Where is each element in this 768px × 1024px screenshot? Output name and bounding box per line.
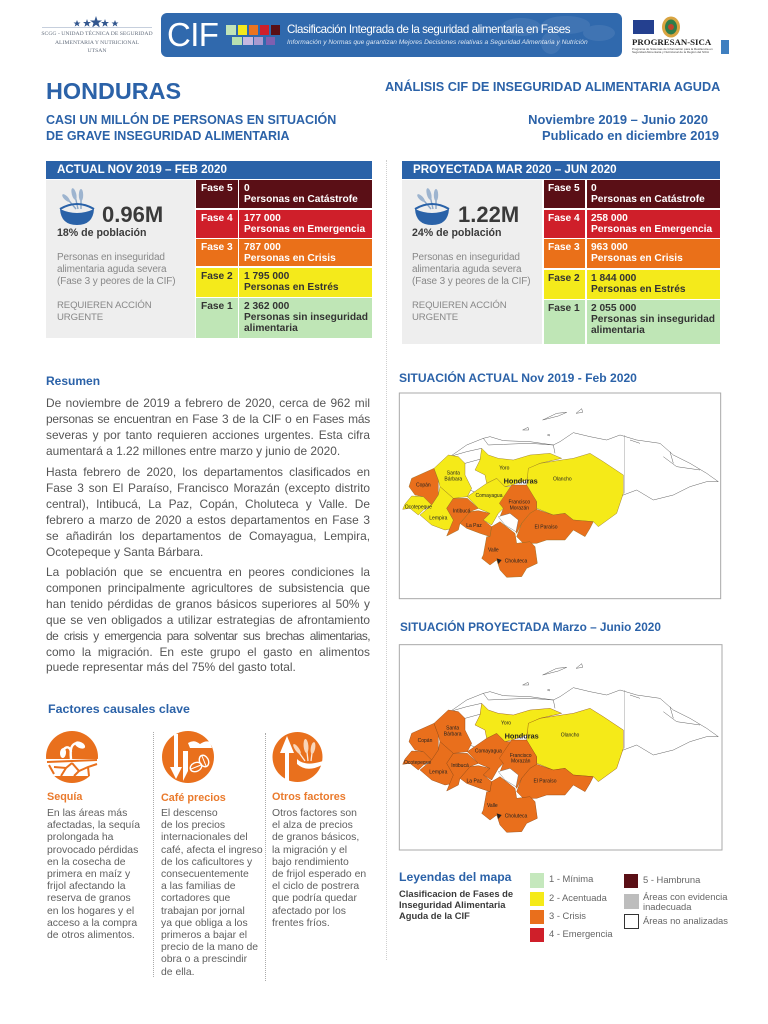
logos: UE, PROGRESAN-SICA, PNUD (632, 16, 729, 54)
row: fase 2: Personas en Estrés (244, 282, 339, 293)
call to action: REQUIEREN ACCIÓN (57, 300, 152, 311)
call to action: REQUIEREN ACCIÓN (412, 300, 507, 311)
subtitle: DE GRAVE INSEGURIDAD ALIMENTARIA (46, 128, 290, 142)
row: fase 5 (544, 180, 720, 208)
logo: SCGG UTSAN: SCGG - UNIDAD TÉCNICA DE SEGURIDAD (41, 31, 153, 37)
legend title: Leyendas del mapa (399, 870, 511, 884)
row: fase 3 (196, 239, 372, 266)
title: Honduras: HONDURAS (46, 78, 181, 104)
row: fase 1 (544, 300, 720, 344)
row: fase 3: Fase 3 (548, 242, 580, 253)
icon: coffee bag and down arrow (162, 731, 214, 783)
map: situacion actual: La Paz (466, 523, 482, 529)
text: resumen paragraph 1: severas y por tanto requieren acciones urgentes. Esta cifra (46, 428, 370, 442)
swatch: acentuada (530, 892, 607, 906)
row: fase 2: Fase 2 (201, 271, 233, 282)
map: situacion proyectada: Bárbara (444, 731, 462, 737)
description: Personas en inseguridad (57, 252, 165, 263)
call to action (57, 300, 152, 323)
swatch: crisis (530, 910, 586, 924)
row: fase 3: Personas en Crisis (244, 253, 336, 264)
row: fase 1: alimentaria (244, 323, 298, 334)
swatch: hambruna: 5 - Hambruna (643, 874, 700, 885)
text: resumen paragraph 2: se añadirán los departamentos de Comayagua, Lempira, (46, 529, 370, 543)
description (57, 252, 175, 287)
row: fase 5: Fase 5 (548, 183, 580, 194)
map: situacion proyectada: Francisco (510, 753, 532, 759)
factor: otros factores (272, 732, 366, 929)
header: actual: ACTUAL NOV 2019 – FEB 2020 (57, 163, 227, 176)
factor text: El descenso de los precios internacionales del café, afecta el ingreso de los caficultores y consecuentemente a las familias de cortadores que trabajan por jornal ya que obliga a los primeros a bajar el precio de la mano de obra o a prescindir de ella. (161, 808, 263, 978)
stat: share of population: 24% de población (412, 227, 501, 239)
map: situacion proyectada: Copán (418, 738, 433, 744)
row: fase 5: Personas en Catástrofe (591, 194, 705, 205)
row: fase 1: Fase 1 (201, 301, 233, 312)
legend subtitle: Inseguridad Alimentaria (399, 899, 505, 910)
logo: SCGG UTSAN (41, 16, 153, 54)
row: fase 1: 2 362 000 (244, 301, 289, 312)
icon: drought seedling (46, 731, 98, 783)
description: Personas en inseguridad (412, 252, 520, 263)
row: fase 5: 0 (244, 183, 250, 194)
text: resumen paragraph 3 (46, 565, 370, 674)
logo: SCGG UTSAN: ALIMENTARIA Y NUTRICIONAL (55, 40, 139, 46)
map: situacion actual: Valle (488, 548, 499, 554)
map: situacion proyectada: Yoro (501, 720, 511, 726)
swatch: evidencia inadecuada: inadecuada (643, 901, 691, 912)
dates: Publicado en diciembre 2019 (542, 128, 719, 143)
subtitle (46, 112, 336, 142)
call to action: URGENTE (57, 312, 103, 323)
map: situacion actual (398, 392, 722, 600)
factor text: Otros factores son el alza de precios de granos básicos, la migración y el bajo rendimiento de frijol esperado en el ciclo de postrera que podría quedar afectado por los frentes fríos. (272, 808, 366, 929)
panel: proyectada (402, 161, 720, 344)
text: resumen paragraph 1 (46, 396, 370, 458)
swatch: emergencia: 4 - Emergencia (549, 928, 613, 939)
row: fase 2: Personas en Estrés (591, 284, 686, 295)
swatch: evidencia inadecuada (624, 891, 728, 912)
swatch: no analizadas: Áreas no analizadas (643, 915, 728, 926)
row: fase 1 (196, 298, 372, 338)
map: situacion actual: Lempira (429, 515, 448, 521)
legend: mapa (399, 870, 728, 942)
factor text: En las áreas más afectadas, la sequía prolongada ha provocado pérdidas en la cosecha de primera en maíz y frijol afectando la reserva de granos en los hogares y el acceso a la compra de otros alimentos. (47, 808, 140, 941)
map: situacion actual: El Paraíso (534, 524, 558, 530)
stat: share of population: 18% de población (57, 227, 146, 239)
description: alimentaria aguda severa (412, 264, 521, 275)
map: situacion actual: Intibucá (453, 508, 471, 514)
legend subtitle: Clasificacion de Fases de (399, 888, 513, 899)
banner: CIF: Información y Normas que garantizan Mejores Decisiones relativas a Seguridad Alimentaria y Nutrición (287, 39, 588, 46)
map: situacion proyectada (398, 644, 722, 850)
map: situacion proyectada: El Paraíso (533, 778, 557, 784)
row: fase 4: Personas en Emergencia (244, 224, 365, 235)
swatch: minima: 1 - Mínima (549, 873, 593, 884)
panel: actual (46, 161, 372, 338)
text: resumen paragraph 1: personas se encuentran en Fase 3 de la CIF o en Fases más (46, 412, 370, 426)
logos: UE, PROGRESAN-SICA, PNUD: PROGRESAN-SICA (632, 37, 711, 47)
dates (528, 112, 719, 143)
swatch: crisis: 3 - Crisis (549, 910, 586, 921)
row: fase 2: 1 844 000 (591, 273, 636, 284)
row: fase 1: Personas sin inseguridad (591, 314, 715, 325)
row: fase 4: Fase 4 (201, 213, 233, 224)
text: resumen paragraph 2: Hasta febrero de 2020, los departamentos clasificados en (46, 465, 370, 479)
banner: CIF (161, 13, 622, 57)
row: fase 5 (196, 180, 372, 208)
row: fase 3: Personas en Crisis (591, 253, 683, 264)
map: situacion proyectada: Santa (446, 725, 459, 731)
row: fase 3 (544, 239, 720, 268)
map: situacion actual: Santa (447, 470, 460, 476)
map: situacion actual: Bárbara (444, 477, 462, 483)
factor title: Café precios (161, 792, 226, 804)
map: situacion proyectada: Ocotepeque (404, 760, 432, 766)
row: fase 4: Personas en Emergencia (591, 224, 712, 235)
text: resumen paragraph 3: La población que se encuentra en peores condiciones la (46, 565, 370, 579)
row: fase 4: Fase 4 (548, 213, 580, 224)
row: fase 1: Fase 1 (548, 303, 580, 314)
factor title: Sequía (47, 791, 82, 803)
text: resumen paragraph 3: que se ven obligados a utilizar estrategias de afrontamiento (46, 613, 370, 627)
row: fase 3: Fase 3 (201, 242, 233, 253)
map: situacion proyectada: Honduras (505, 732, 539, 741)
description (412, 252, 530, 287)
map: situacion actual: Olancho (553, 477, 572, 483)
row: fase 4 (196, 210, 372, 238)
row: fase 5: Fase 5 (201, 183, 233, 194)
header: proyectada (402, 161, 720, 179)
map: situacion proyectada: Olancho (561, 733, 580, 739)
swatch: hambruna (624, 874, 700, 888)
stat: 1.22M: 1.22M (458, 202, 519, 227)
logos: UE, PROGRESAN-SICA, PNUD: Programa de Sistemas de Información para la Resiliencia en (632, 47, 713, 51)
row: fase 5: 0 (591, 183, 597, 194)
text: resumen paragraph 3: puede representar más del 75% del gasto total. (46, 660, 296, 674)
row: fase 2: 1 795 000 (244, 271, 289, 282)
map: situacion proyectada: Valle (487, 803, 498, 809)
heading: analysis: ANÁLISIS CIF DE INSEGURIDAD ALIMENTARIA AGUDA (385, 80, 720, 94)
map: situacion actual: Honduras (504, 477, 538, 486)
text: resumen paragraph 3: de crisis y emergencia para solventar sus brechas alimentarias, (46, 629, 370, 643)
text: resumen paragraph 1: aumentará a 1.22 millones entre marzo y junio de 2020. (46, 444, 340, 458)
row: fase 4: 177 000 (244, 213, 281, 224)
subtitle: CASI UN MILLÓN DE PERSONAS EN SITUACIÓN (46, 113, 336, 127)
text: resumen paragraph 3: como la migración. En este grupo el gasto en alimentos (46, 645, 370, 659)
banner: CIF: Clasificación Integrada de la seguridad alimentaria en Fases (287, 23, 570, 36)
factor: cafe precios (161, 731, 263, 978)
text: resumen paragraph 2: febrero a marzo de 2020 a estos departamentos en Fase 3 (46, 513, 370, 527)
map: situacion proyectada: Lempira (429, 769, 448, 775)
swatch: evidencia inadecuada: Áreas con evidencia (643, 891, 727, 902)
heading: mapa proyectado: SITUACIÓN PROYECTADA Marzo – Junio 2020 (400, 620, 661, 634)
map: situacion actual: Ocotepeque (405, 505, 432, 511)
text: resumen paragraph 3: han tenido pérdidas de granos básicos superiores al 50% y (46, 597, 370, 611)
row: fase 2: Fase 2 (548, 273, 580, 284)
row: fase 1: alimentaria (591, 325, 645, 336)
stat: 0.96M: 0.96M (102, 202, 163, 227)
legend subtitle: Aguda de la CIF (399, 910, 470, 921)
map: situacion actual: Comayagua (476, 493, 503, 499)
map: situacion actual: Morazán (510, 505, 529, 511)
summary card (46, 180, 195, 338)
row: fase 3: 787 000 (244, 242, 281, 253)
row: fase 5: Personas en Catástrofe (244, 194, 358, 205)
map: situacion proyectada: Morazán (511, 759, 531, 765)
call to action: URGENTE (412, 312, 458, 323)
description: (Fase 3 y peores de la CIF) (57, 276, 175, 287)
icon: bowl of grain (414, 188, 450, 225)
map: situacion proyectada: Choluteca (505, 814, 527, 820)
heading: mapa actual: SITUACIÓN ACTUAL Nov 2019 - Feb 2020 (399, 371, 637, 385)
swatch: emergencia (530, 928, 613, 942)
text: resumen paragraph 3: componen principalmente agricultores de subsistencia que (46, 581, 370, 595)
map: situacion actual: Yoro (499, 466, 510, 472)
heading: resumen: Resumen (46, 374, 100, 388)
text: resumen paragraph 2 (46, 465, 370, 559)
map: situacion actual: Choluteca (505, 559, 527, 565)
logos: UE, PROGRESAN-SICA, PNUD: Seguridad Alimentaria y Nutricional de la Región del SICA (632, 50, 709, 54)
swatch: no analizadas (624, 914, 728, 929)
text: resumen paragraph 1: De noviembre de 2019 a febrero de 2020, cerca de 962 mil (46, 396, 370, 410)
factor title: Otros factores (272, 791, 346, 803)
map: situacion proyectada: Intibucá (451, 763, 469, 769)
text: resumen paragraph 2: central), Intibucá, La Paz, Copán, Choluteca y Valle. De (46, 497, 370, 511)
text: resumen paragraph 2: Fase 3 son El Paraíso, Francisco Morazán (excepto distrito (46, 481, 370, 495)
row: fase 2 (544, 270, 720, 299)
icon: bowl of grain (60, 188, 94, 225)
heading: factores causales: Factores causales clave (48, 702, 190, 716)
row: fase 4: 258 000 (591, 213, 628, 224)
row: fase 3: 963 000 (591, 242, 628, 253)
banner: CIF: CIF (167, 16, 218, 53)
map: situacion proyectada: La Paz (467, 779, 483, 785)
swatch: minima (530, 873, 594, 888)
description: alimentaria aguda severa (57, 264, 166, 275)
summary card (402, 180, 542, 344)
row: fase 1: Personas sin inseguridad (244, 312, 368, 323)
header: actual (46, 161, 372, 179)
text: resumen paragraph 2: Ocotepeque y Santa Bárbara. (46, 545, 203, 559)
row: fase 2 (196, 268, 372, 297)
map: situacion actual: Copán (416, 482, 431, 488)
map: situacion actual: Francisco (508, 500, 530, 506)
icon: wheat bowl and up arrow (272, 732, 322, 782)
logo: SCGG UTSAN: UTSAN (88, 48, 106, 54)
row: fase 1: 2 055 000 (591, 303, 636, 314)
description: (Fase 3 y peores de la CIF) (412, 276, 530, 287)
header: proyectada: PROYECTADA MAR 2020 – JUN 2020 (413, 163, 617, 176)
factor: sequia (46, 731, 140, 941)
row: fase 4 (544, 210, 720, 238)
legend subtitle (399, 888, 513, 921)
call to action (412, 300, 507, 323)
map: situacion proyectada: Comayagua (475, 749, 502, 755)
dates: Noviembre 2019 – Junio 2020 (528, 112, 708, 127)
swatch: acentuada: 2 - Acentuada (549, 892, 607, 903)
